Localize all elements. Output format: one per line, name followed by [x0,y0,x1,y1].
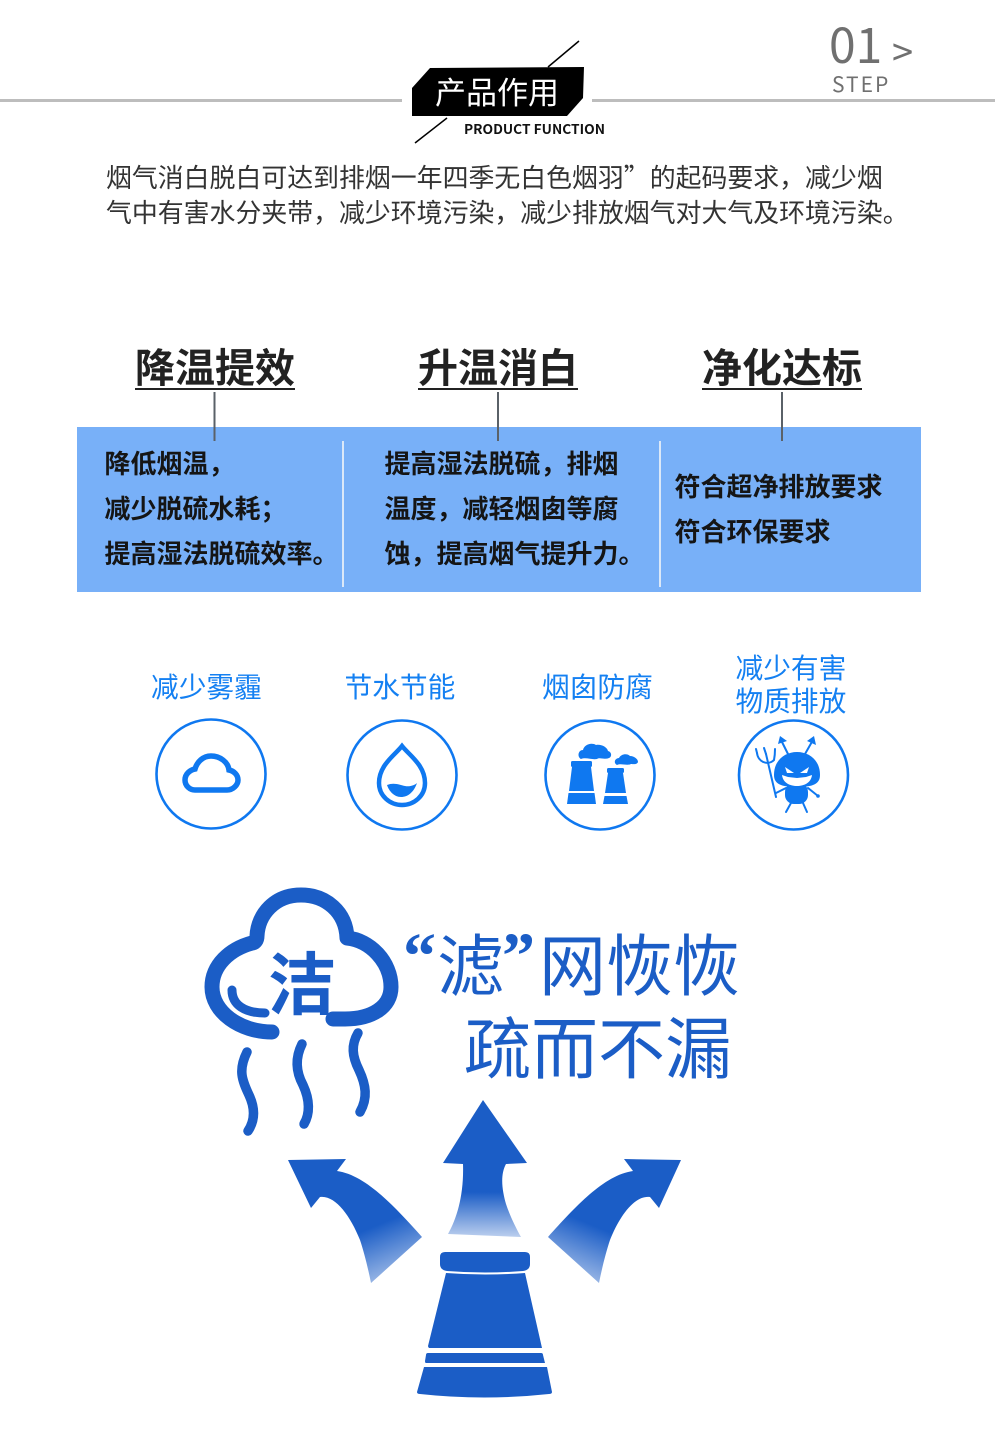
section title badge: 产品作用 [435,68,559,113]
icon: water drop [348,720,456,830]
slogan: 网恢恢 [539,930,740,1005]
step number [829,7,913,99]
slogan: 疏而不漏 [464,1013,732,1088]
step number: STEP [832,69,890,99]
intro text: 烟气消白脱白可达到排烟一年四季无白色烟羽”的起码要求，减少烟 [106,158,883,195]
column 2 text [384,444,645,571]
label: reduce harmful emissions: 减少有害 [736,653,846,684]
column 1 text: 减少脱硫水耗； [104,489,287,526]
slogan [403,920,740,1088]
slogan: 滤 [437,930,504,1005]
icon: chimneys [546,720,654,830]
step number: > [892,22,913,77]
label: reduce harmful emissions: 物质排放 [736,686,846,717]
slogan: “ [403,920,436,993]
chimney [417,1252,552,1398]
column 1 text: 降低烟温， [104,444,235,481]
column 1 text [104,444,339,571]
column 2 text: 提高湿法脱硫，排烟 [384,444,619,481]
heading: cooling: 降温提效 [135,347,295,391]
column 1 text: 提高湿法脱硫效率。 [104,534,339,571]
icon: clean cloud with steam [212,895,391,1131]
blue benefit panel [77,427,921,592]
label: reduce smog: 减少雾霾 [151,672,262,703]
arrow: left [288,1159,422,1283]
step number: 01 [829,7,882,77]
label: save water and energy: 节水节能 [344,672,455,703]
arrow: up [443,1100,527,1237]
column 3 text: 符合超净排放要求 [674,467,883,504]
label: chimney corrosion protection: 烟囱防腐 [542,672,653,703]
label: reduce harmful emissions [736,653,846,717]
heading: heating: 升温消白 [418,347,578,391]
section title badge: PRODUCT FUNCTION [464,118,605,138]
column 2 text: 蚀，提高烟气提升力。 [384,534,645,571]
slogan: ” [502,920,535,993]
icon: pollutant devil [739,720,848,830]
column 2 text: 温度，减轻烟囱等腐 [384,489,619,526]
icon: cloud [156,720,266,828]
section title badge [412,41,605,143]
column 3 text: 符合环保要求 [674,512,831,549]
arrow: right [548,1159,681,1283]
icon: clean cloud with steam: 洁 [268,930,336,1029]
intro text: 气中有害水分夹带，减少环境污染，减少排放烟气对大气及环境污染。 [106,193,909,230]
steam lines [242,1033,365,1131]
intro text [106,158,909,230]
column 3 text [674,467,883,549]
heading: purification: 净化达标 [702,347,862,391]
